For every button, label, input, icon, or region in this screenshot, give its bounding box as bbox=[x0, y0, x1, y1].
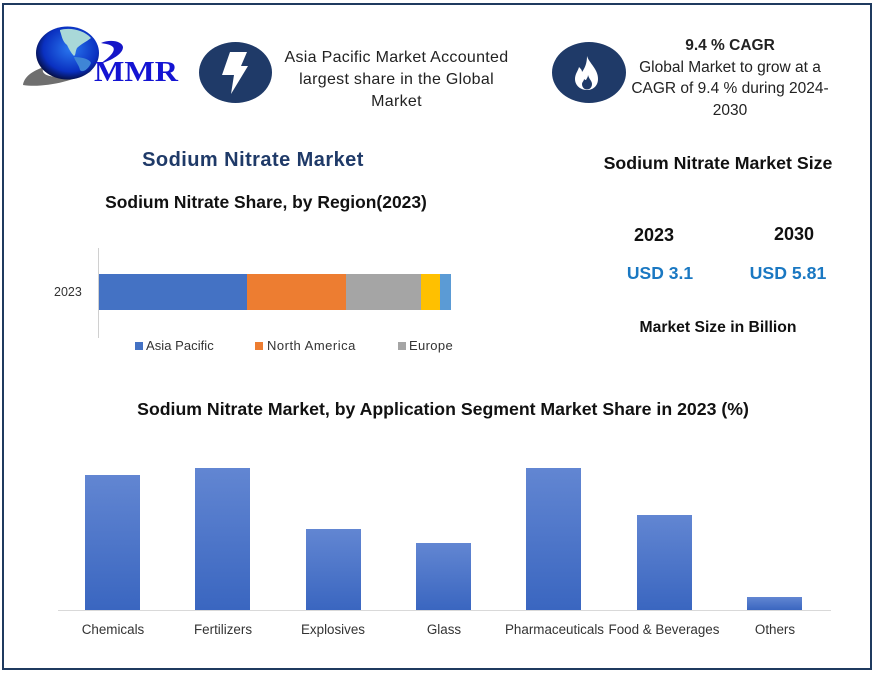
text: Market Size in Billion: Market Size in Billion bbox=[640, 319, 796, 336]
bar: Chemicals bbox=[85, 475, 140, 610]
category labels: Food & Beverages bbox=[609, 622, 719, 637]
chart: stacked regional bar bbox=[54, 248, 453, 353]
bar: Explosives bbox=[306, 529, 361, 610]
text: CAGR callout: 2030 bbox=[713, 102, 747, 118]
text: Asia Pacific callout: Market bbox=[371, 93, 422, 110]
bar: Glass bbox=[416, 543, 471, 610]
bar: Others bbox=[747, 597, 802, 610]
bar segment: light blue bbox=[440, 274, 451, 310]
stat: 2023: USD 3.1 bbox=[627, 263, 693, 283]
bar segment: yellow bbox=[421, 274, 440, 310]
bar segment: North America bbox=[247, 274, 346, 310]
heading: Market Size: Sodium Nitrate Market Size bbox=[604, 153, 832, 173]
stat: 2023: 2023 bbox=[634, 225, 674, 245]
category labels: Pharmaceuticals bbox=[505, 622, 604, 637]
category labels: Fertilizers bbox=[194, 622, 252, 637]
bar: Food & Beverages bbox=[637, 515, 692, 610]
stat: 2030 bbox=[750, 224, 826, 283]
category labels: Chemicals bbox=[82, 622, 144, 637]
logo: MMR globe: MMR bbox=[94, 57, 179, 88]
icon: flame bbox=[552, 42, 626, 103]
text: CAGR callout: CAGR of 9.4 % during 2024- bbox=[631, 80, 829, 97]
text: CAGR callout: Global Market to grow at a bbox=[639, 58, 821, 76]
text: Asia Pacific callout: Asia Pacific Market Accounted bbox=[285, 49, 508, 66]
text: CAGR callout bbox=[631, 37, 829, 118]
heading: application segment: Sodium Nitrate Market, by Application Segment Market Share in 2023 (%) bbox=[137, 399, 749, 419]
bar: Fertilizers bbox=[195, 468, 250, 610]
bar: Pharmaceuticals bbox=[526, 468, 581, 610]
heading: Sodium Nitrate Market: Sodium Nitrate Market bbox=[142, 149, 364, 171]
category labels: Explosives bbox=[301, 622, 365, 637]
logo: MMR globe bbox=[23, 26, 179, 88]
legend: Europe bbox=[409, 338, 453, 353]
stat: 2023 bbox=[627, 225, 693, 283]
axis label: 2023: 2023 bbox=[54, 285, 82, 299]
category labels bbox=[82, 622, 795, 637]
stat: 2030: USD 5.81 bbox=[750, 263, 826, 283]
heading: share by region: Sodium Nitrate Share, by Region(2023) bbox=[105, 192, 427, 212]
bar segment: Europe bbox=[346, 274, 421, 310]
text: CAGR callout: 9.4 % CAGR bbox=[685, 37, 775, 54]
legend bbox=[135, 338, 453, 353]
bar segment: Asia Pacific bbox=[99, 274, 247, 310]
stat: 2030: 2030 bbox=[774, 224, 814, 244]
legend: North America bbox=[267, 338, 356, 353]
text: Asia Pacific callout: largest share in the Global bbox=[299, 71, 494, 88]
text: Asia Pacific callout bbox=[284, 49, 508, 110]
legend: Asia Pacific bbox=[146, 338, 214, 353]
category labels: Others bbox=[755, 622, 795, 637]
category labels: Glass bbox=[427, 622, 461, 637]
icon: lightning bolt bbox=[199, 42, 272, 103]
chart: application bars bbox=[58, 468, 831, 611]
